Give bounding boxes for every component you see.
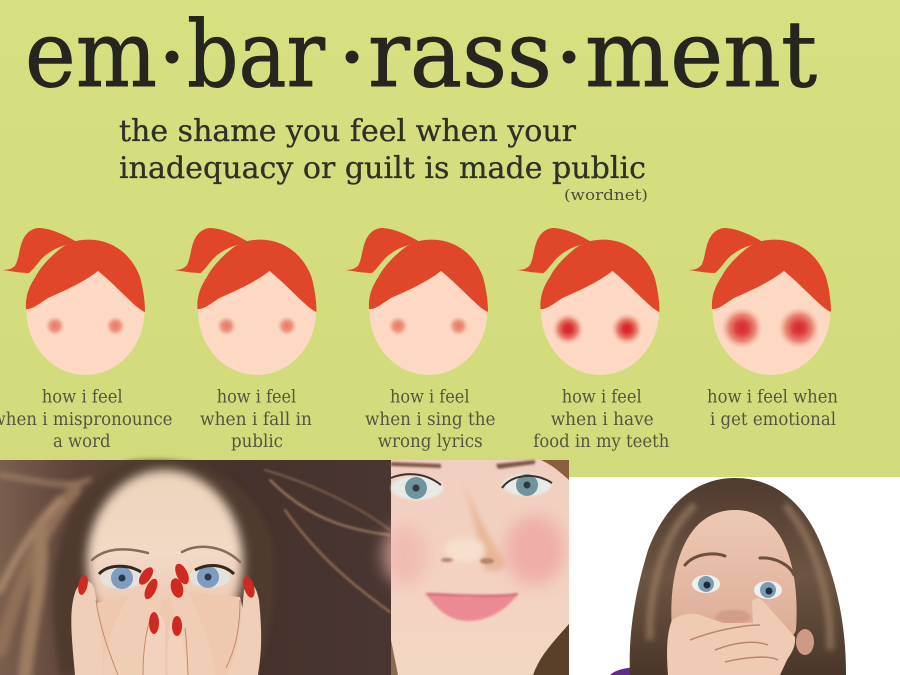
caption 2: when i fall in bbox=[200, 410, 312, 430]
caption 3: how i feel bbox=[390, 388, 470, 408]
purple shirt bbox=[610, 667, 640, 675]
hands bbox=[71, 581, 261, 675]
caption 5: i get emotional bbox=[710, 410, 836, 430]
title: em bbox=[25, 1, 157, 108]
nostrils bbox=[441, 558, 494, 564]
caption 3 bbox=[365, 388, 496, 452]
rosy cheeks bbox=[505, 515, 565, 585]
eye right bbox=[502, 474, 552, 496]
caption 4: how i feel bbox=[562, 388, 642, 408]
eye left bbox=[692, 575, 720, 593]
ear bbox=[796, 629, 814, 655]
hair corner top right bbox=[541, 460, 569, 480]
caption 1: how i feel bbox=[42, 388, 123, 408]
title: · bbox=[338, 4, 367, 111]
eye left bbox=[99, 566, 142, 589]
nose shading bbox=[462, 480, 505, 571]
hair corner bottom right bbox=[533, 624, 569, 675]
hair bbox=[630, 478, 846, 675]
photo: smiling woman close-up bbox=[383, 460, 569, 675]
red nails bbox=[77, 562, 257, 636]
eyebrows bbox=[391, 460, 535, 469]
caption 3: when i sing the bbox=[365, 410, 496, 430]
forehead and skin bbox=[87, 470, 243, 654]
eye right bbox=[754, 581, 782, 599]
eye right bbox=[190, 565, 234, 588]
lips bbox=[426, 594, 518, 621]
face 5 bbox=[688, 228, 831, 375]
photo: girl covering mouth bbox=[569, 477, 900, 675]
caption 3: wrong lyrics bbox=[378, 432, 483, 452]
face 2 bbox=[174, 228, 316, 375]
caption 2: public bbox=[231, 432, 283, 452]
photo: woman covering face with red nails bbox=[0, 460, 391, 675]
nose bbox=[715, 610, 751, 624]
face bbox=[671, 510, 797, 660]
title: rass bbox=[368, 1, 552, 108]
dark hair around face bbox=[53, 460, 275, 675]
definition text bbox=[119, 114, 646, 186]
caption 1 bbox=[0, 388, 172, 452]
caption 1: a word bbox=[53, 432, 110, 452]
hands over mouth bbox=[667, 598, 795, 675]
title: · bbox=[158, 4, 187, 111]
caption 2: how i feel bbox=[217, 388, 297, 408]
background panel bbox=[0, 0, 900, 478]
brows bbox=[92, 547, 240, 562]
eye left bbox=[391, 474, 443, 500]
face 4 bbox=[516, 228, 660, 375]
caption 5 bbox=[707, 388, 838, 430]
caption 4 bbox=[533, 388, 669, 452]
caption 4: when i have bbox=[551, 410, 654, 430]
hair strands bbox=[0, 475, 90, 675]
face 1 bbox=[2, 228, 145, 375]
caption 4: food in my teeth bbox=[533, 432, 669, 452]
title: ment bbox=[585, 1, 817, 108]
caption 2 bbox=[200, 388, 312, 452]
title: · bbox=[554, 4, 584, 111]
definition text: the shame you feel when your bbox=[119, 114, 577, 149]
title bbox=[25, 1, 817, 111]
definition text: inadequacy or guilt is made public bbox=[119, 151, 646, 186]
caption 5: how i feel when bbox=[707, 388, 838, 408]
source note: (wordnet) bbox=[564, 186, 648, 204]
title: bar bbox=[187, 1, 325, 108]
brows bbox=[685, 554, 794, 575]
hair highlights bbox=[650, 505, 830, 650]
face 3 bbox=[345, 228, 488, 375]
